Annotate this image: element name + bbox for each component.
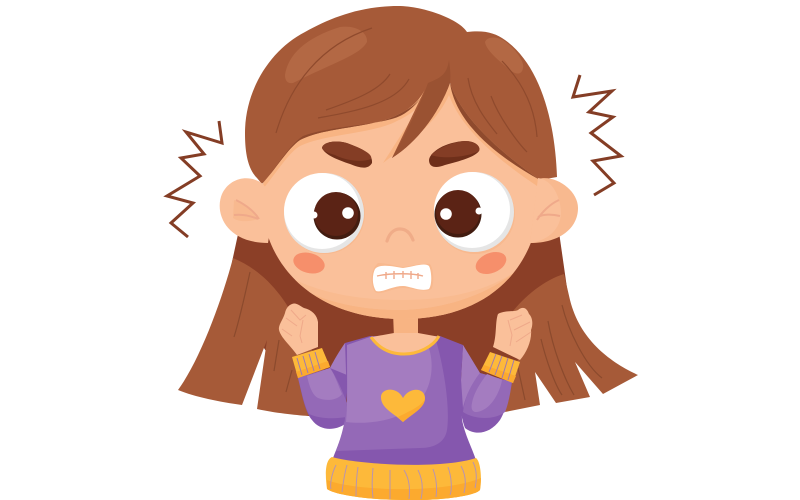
left eyebrow xyxy=(322,141,372,168)
nose xyxy=(387,229,413,241)
left anger zigzag xyxy=(167,121,222,237)
right cuff xyxy=(481,352,520,383)
face: lower shade xyxy=(311,273,514,319)
left cuff xyxy=(292,348,330,378)
left sleeve xyxy=(298,343,350,429)
right sleeve xyxy=(460,345,512,433)
left ear xyxy=(220,178,275,243)
right anger zigzag xyxy=(573,75,621,195)
face xyxy=(263,84,538,319)
sweater hem xyxy=(326,457,481,500)
right eyebrow xyxy=(429,141,479,167)
left eye xyxy=(284,173,365,254)
torso xyxy=(333,336,476,472)
illustration: angry girl xyxy=(167,6,638,500)
hair: top fringe xyxy=(245,6,557,184)
neck skin and collar xyxy=(371,333,440,355)
right cheek xyxy=(472,248,510,278)
right fist xyxy=(493,308,532,360)
face: fringe shadow xyxy=(263,84,538,186)
hair: back dark layer xyxy=(232,225,568,416)
right ear xyxy=(530,178,578,243)
mouth xyxy=(372,263,433,293)
right eye xyxy=(434,172,515,254)
heart xyxy=(381,390,425,422)
left fist xyxy=(279,303,318,355)
hair: left strands xyxy=(178,258,330,416)
neck xyxy=(393,312,418,338)
hair highlight: left xyxy=(285,27,367,83)
hair: forelock spike xyxy=(392,60,450,158)
left cheek xyxy=(291,249,327,277)
hair highlight: right xyxy=(485,38,523,74)
hair: right strands xyxy=(505,274,638,412)
